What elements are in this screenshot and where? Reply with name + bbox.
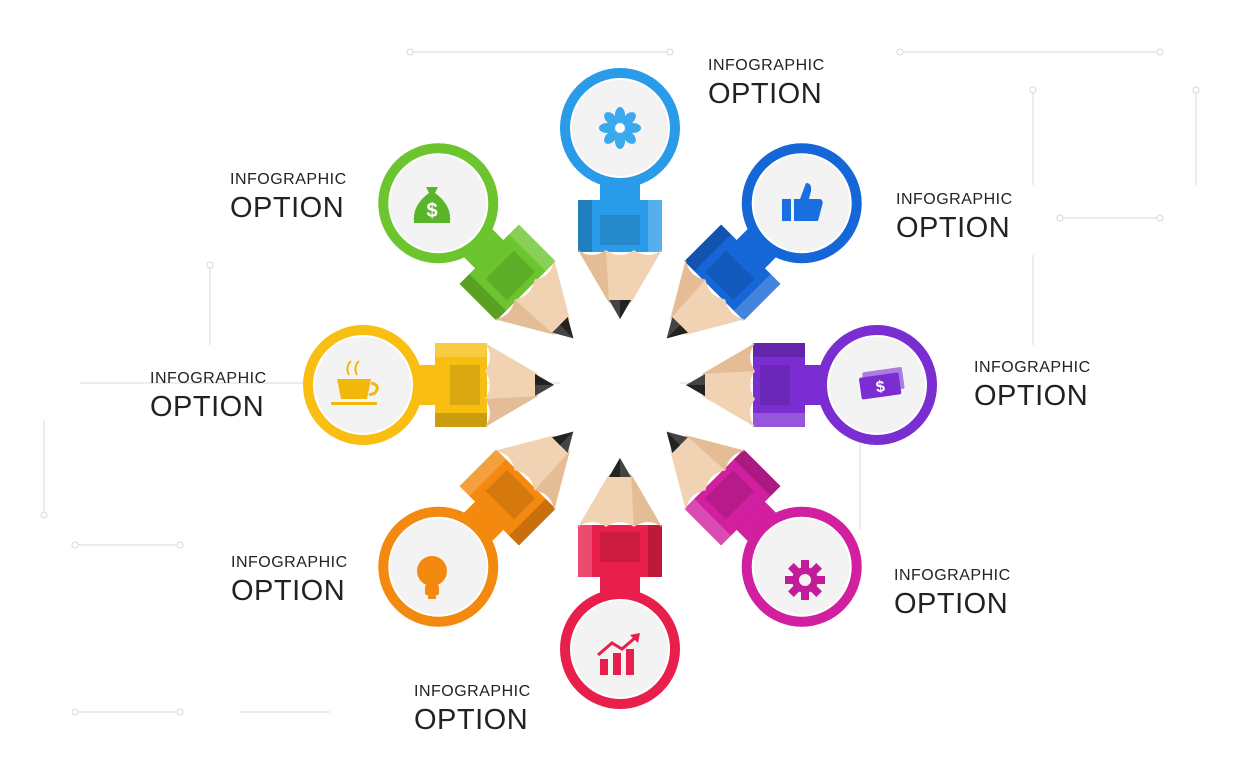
icon: thumbs up bbox=[782, 183, 823, 221]
label: top bbox=[708, 57, 825, 110]
pencil: bottom-right magenta bbox=[624, 389, 887, 652]
label: bottom-right: INFOGRAPHIC bbox=[894, 567, 1011, 584]
icon: flower bbox=[599, 107, 641, 149]
label: bottom-right: OPTION bbox=[894, 588, 1008, 620]
label: top-left: OPTION bbox=[230, 192, 344, 224]
label: bottom: OPTION bbox=[414, 704, 528, 736]
label: top: OPTION bbox=[708, 78, 822, 110]
icon: money bag bbox=[414, 187, 450, 223]
pencil: top-left green bbox=[353, 118, 616, 381]
icon: chart bbox=[598, 633, 640, 675]
icon: bulb bbox=[417, 556, 447, 599]
pencil: right purple bbox=[686, 325, 937, 445]
label: top-right bbox=[896, 191, 1013, 244]
label: right: INFOGRAPHIC bbox=[974, 359, 1091, 376]
label: left bbox=[150, 370, 267, 423]
label: top-right: INFOGRAPHIC bbox=[896, 191, 1013, 208]
icon: gear bbox=[785, 560, 825, 600]
pencil: bottom red bbox=[560, 458, 680, 709]
label: left: OPTION bbox=[150, 391, 264, 423]
pencil: top blue bbox=[560, 68, 680, 319]
pencil: left yellow bbox=[303, 325, 554, 445]
label: right bbox=[974, 359, 1091, 412]
icon: cup bbox=[331, 361, 377, 405]
label: bottom-left: INFOGRAPHIC bbox=[231, 554, 348, 571]
label: bottom-right bbox=[894, 567, 1011, 620]
label: top-left bbox=[230, 171, 347, 224]
label: bottom-left bbox=[231, 554, 348, 607]
label: bottom bbox=[414, 683, 531, 736]
pencil: top-right dark blue bbox=[624, 118, 887, 381]
label: top-right: OPTION bbox=[896, 212, 1010, 244]
label: right: OPTION bbox=[974, 380, 1088, 412]
label: bottom: INFOGRAPHIC bbox=[414, 683, 531, 700]
icon: money bbox=[858, 367, 905, 400]
label: left: INFOGRAPHIC bbox=[150, 370, 267, 387]
pencil: bottom-left orange bbox=[353, 389, 616, 652]
label: top: INFOGRAPHIC bbox=[708, 57, 825, 74]
label: top-left: INFOGRAPHIC bbox=[230, 171, 347, 188]
label: bottom-left: OPTION bbox=[231, 575, 345, 607]
icon: money bag: $ bbox=[426, 200, 438, 222]
icon: money: $ bbox=[875, 378, 886, 397]
